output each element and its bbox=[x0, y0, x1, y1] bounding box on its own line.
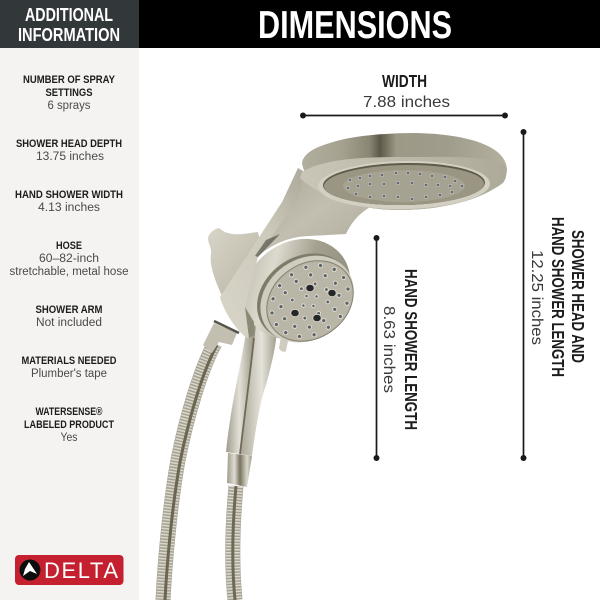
header: additional information: ADDITIONAL bbox=[25, 4, 113, 25]
spec: shower arm: Not included bbox=[36, 317, 102, 329]
logo: delta: DELTA bbox=[44, 558, 118, 583]
header: additional information bbox=[0, 0, 139, 48]
hose connector bbox=[203, 321, 239, 353]
rain head nozzles bbox=[346, 171, 464, 201]
spec: number of spray settings: NUMBER OF SPRAY bbox=[23, 74, 116, 86]
large dark nozzles bbox=[291, 284, 336, 322]
dimension: width: 7.88 inches bbox=[363, 94, 450, 111]
wall mount bbox=[208, 228, 262, 296]
spec: materials needed bbox=[22, 355, 117, 380]
arm bbox=[220, 170, 302, 338]
spec: hand shower width: HAND SHOWER WIDTH bbox=[15, 189, 123, 201]
short metal hose bbox=[233, 486, 236, 600]
dimension: width: WIDTH bbox=[382, 71, 427, 91]
logo: delta bbox=[15, 555, 124, 585]
title: dimensions bbox=[139, 0, 600, 48]
shell bbox=[224, 218, 370, 360]
spray face bbox=[251, 244, 369, 358]
neck bbox=[256, 168, 372, 258]
dimension: hand shower length bbox=[374, 235, 421, 461]
spec: watersense labeled product: LABELED PRODUCT bbox=[24, 419, 114, 431]
long metal hose bbox=[163, 343, 217, 600]
spec: watersense labeled product: WATERSENSE® bbox=[36, 406, 102, 418]
spec: hand shower width: 4.13 inches bbox=[38, 202, 100, 214]
spec: hose bbox=[10, 240, 128, 278]
handle collar bbox=[227, 453, 252, 487]
spec: hose: 60–82-inch bbox=[39, 253, 99, 265]
spec: number of spray settings: 6 sprays bbox=[48, 100, 91, 112]
hand shower head bbox=[224, 218, 370, 360]
dimension: hand shower length: 8.63 inches bbox=[380, 306, 397, 393]
dimension: width bbox=[300, 71, 508, 118]
pull tab bbox=[279, 336, 289, 352]
header: additional information: INFORMATION bbox=[18, 24, 120, 45]
handle bbox=[226, 325, 276, 456]
dimension: shower head and hand shower length: 12.25 inches bbox=[528, 250, 545, 345]
rim bbox=[302, 133, 507, 210]
dimension: shower head and hand shower length bbox=[520, 129, 588, 461]
sidebar panel bbox=[0, 48, 139, 600]
spec: number of spray settings: SETTINGS bbox=[46, 87, 92, 99]
spec: shower arm bbox=[36, 304, 102, 329]
spec: watersense labeled product: Yes bbox=[60, 432, 78, 444]
dimension: shower head and hand shower length: HAND SHOWER LENGTH bbox=[548, 217, 568, 377]
underside lip bbox=[300, 157, 506, 210]
spec: shower head depth: SHOWER HEAD DEPTH bbox=[16, 138, 122, 150]
spec: shower head depth bbox=[16, 138, 122, 163]
illustration: hand shower and hoses bbox=[163, 133, 507, 600]
title: dimensions: DIMENSIONS bbox=[258, 4, 452, 47]
dimension: hand shower length: HAND SHOWER LENGTH bbox=[401, 269, 421, 430]
rain shower head bbox=[300, 133, 507, 210]
spec: hose: stretchable, metal hose bbox=[10, 266, 128, 278]
dimension: shower head and hand shower length: SHOWER HEAD AND bbox=[568, 230, 588, 363]
spec: number of spray settings bbox=[23, 74, 116, 112]
spec: watersense labeled product bbox=[24, 406, 114, 444]
spec: shower head depth: 13.75 inches bbox=[36, 151, 104, 163]
spec: hand shower width bbox=[15, 189, 123, 214]
spec: hose: HOSE bbox=[56, 240, 82, 252]
spec: materials needed: MATERIALS NEEDED bbox=[22, 355, 117, 367]
spec: materials needed: Plumber's tape bbox=[31, 368, 107, 380]
spec: shower arm: SHOWER ARM bbox=[36, 304, 102, 316]
hand shower nozzles bbox=[255, 248, 365, 354]
